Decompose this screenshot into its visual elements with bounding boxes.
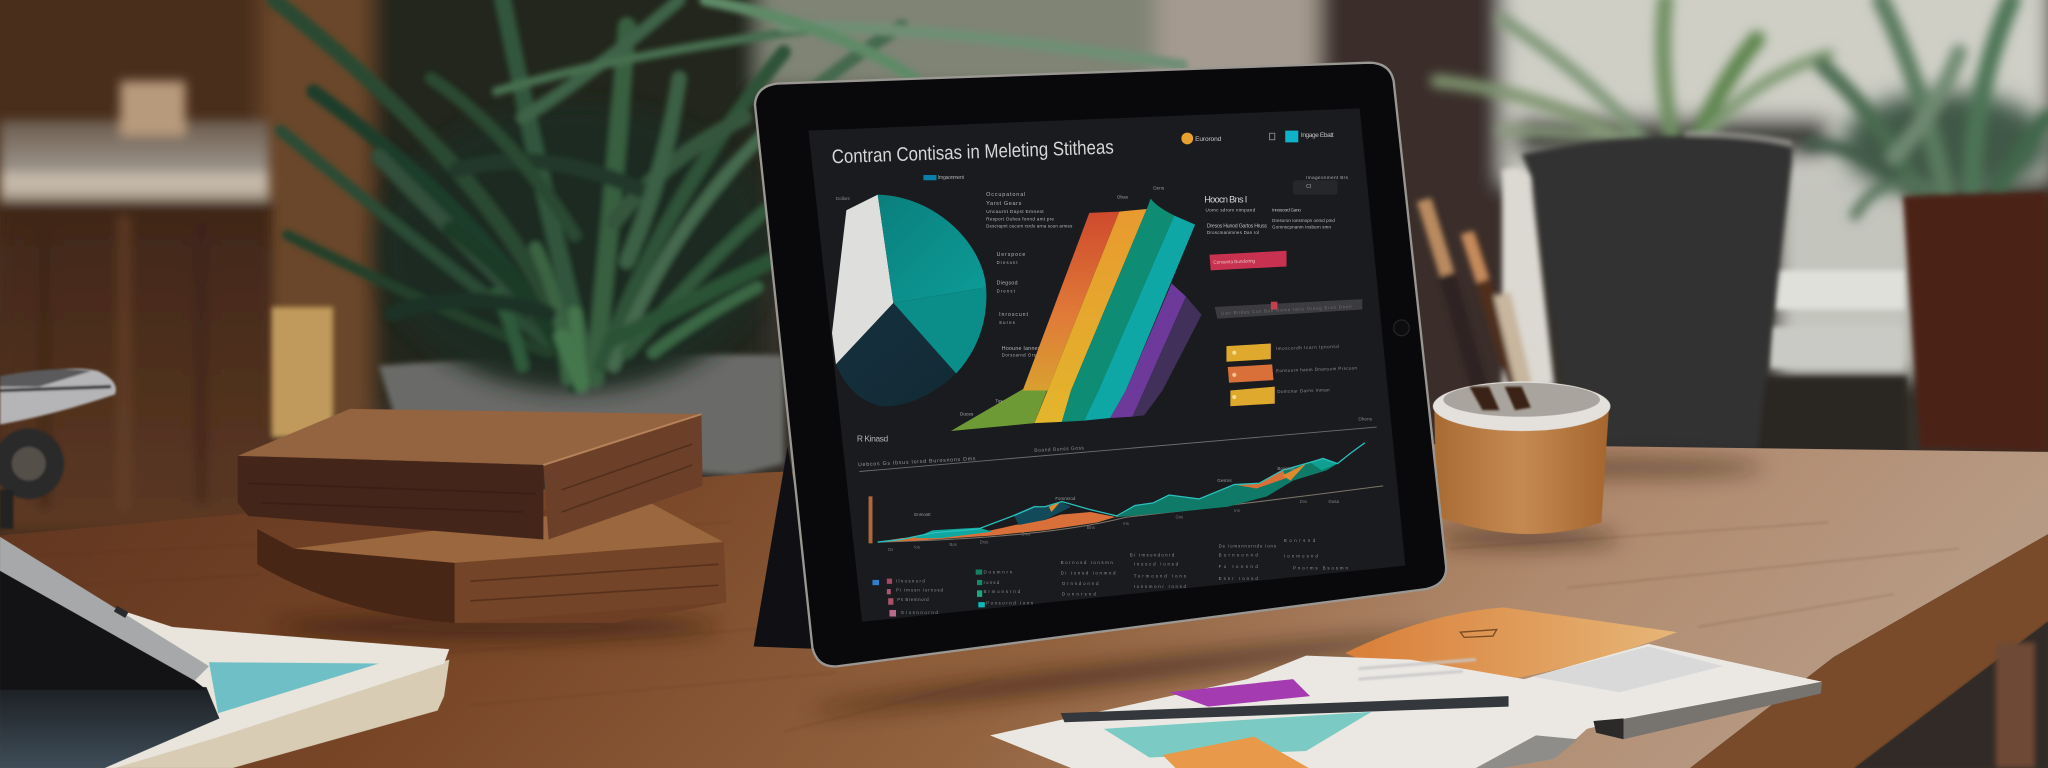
bottom legend table: Bornsonnd [1219,552,1258,557]
pie chart notes: Dresont [997,260,1018,265]
bottom legend table: Bi Imsondonrd [1130,552,1175,557]
pie chart notes: Occupatonal [986,192,1025,198]
header legend: Eurorond [1195,136,1222,143]
right text block [1204,194,1335,235]
chart axis labels: Ins [1234,508,1240,513]
bottom legend table: Ionsmonr Ionsd [1134,584,1186,589]
bottom legend table: Esnr Ionsd [1219,576,1258,581]
left plant leaves [274,0,1182,392]
chart axis labels [888,499,1307,552]
area line chart: Gesrns [1217,478,1232,483]
pie chart notes: Resport Ouhes fonnd amt pre [986,217,1054,222]
bottom legend table: Brmonsrnd [984,589,1021,594]
rainbow ribbon chart [951,199,1202,431]
desk wood grain [26,522,1959,731]
header legend: Imgaonment [938,175,964,181]
bottom legend table: Ilnosnord [896,579,925,584]
right text block: Gomnscpnanm Insbern smn [1272,225,1331,230]
metal object at left edge [0,369,116,529]
open notebook with orange cover [990,607,1822,768]
bottom legend table: Fo Ionsnd [1219,564,1258,569]
pie chart notes: Dollars [836,196,851,201]
gray status bar: Uan Bndas Cos Bsn Rome Ians Oresg Eros Dnon [1221,304,1352,316]
bottom legend table: Dosmnrn [984,569,1013,574]
right text block: Dresoron Ionsmnpn onmd pmd [1272,218,1335,223]
pie chart notes: Diegsod [997,281,1018,287]
section heading and rule: Boand Bunss Goss [1034,445,1085,454]
pie chart notes: Obas [1117,195,1129,200]
right text block: Dresos Hunod Gartos Hruss [1207,223,1267,229]
pie chart notes: Inroscunt [999,312,1028,318]
chart axis labels: Oms [1021,532,1030,537]
chart axis labels: Bos [950,542,957,547]
camera [1394,320,1409,336]
section heading and rule: Dhens [1358,417,1373,422]
red-brown pot far right [1903,192,2048,452]
bottom legend table: Tormosnd Ions [1134,573,1187,578]
chart axis labels: Dros [980,539,988,544]
colored legend cards: Imoscordh Icarn Ipnonsd [1276,344,1339,351]
header legend: Cl [1306,184,1311,190]
bottom legend table: Erosnnornd [901,610,938,615]
bottom legend table: Pi Imosn Iornosd [896,588,944,593]
pie chart notes [836,185,1165,358]
section heading and rule: Uebcos Gs Ibsus Iorsd Burosnons Dms [858,456,976,468]
second device and notebook at lower left [0,537,449,768]
bottom legend table: Ornsdonnd [1062,581,1099,586]
area line chart: Fomnsrod [1055,496,1076,501]
right text block: Innoscord Gano [1272,208,1301,213]
pie chart notes: Sures [999,320,1015,325]
header legend: Ingage Ebatt [1301,132,1334,139]
soft shadows on the desk [274,460,1763,721]
bottom legend table: De Iomsnnornds Ions [1219,543,1277,548]
chart axis labels: Blns [1087,525,1095,530]
bottom legend table: Donnrsnd [1062,592,1096,597]
pie chart notes: Drenst [997,289,1016,294]
pie chart notes: Uerspoce [997,252,1025,258]
right text block: Uomc sdrom nimpand [1206,208,1256,213]
right text block: Droscmanimnes Dan Iol [1207,230,1259,235]
pie chart notes: Descrapnt oucom rsrdo arna soun armes [986,223,1073,228]
tablet body [755,63,1446,666]
bottom legend table: Di Ionsd Ionmnd [1061,571,1116,576]
pie chart notes: Dens [1153,185,1165,190]
desk top [0,444,2048,768]
right plant leaves and far right plant [1437,0,2048,216]
area line chart: Enmostr [914,512,931,517]
header legend: Imageonment Brs [1306,175,1349,180]
pie chart notes: Yarst Gears [986,201,1022,207]
pie chart notes: Dorscarnd Ors [1002,353,1036,358]
bottom legend table: Ponsornd Ionn [986,601,1034,606]
chart axis labels: Dns [1300,499,1307,504]
rainbow ribbon chart: Duces [960,411,974,416]
bottom legend table: Bornosd Ionsmn [1061,560,1113,565]
chart axis labels: Ds [888,547,893,552]
rainbow ribbon chart: Tos [995,398,1003,403]
red button [1209,251,1287,270]
colored legend cards: Eonsoorn hanm Dnansom Prscosn [1276,365,1358,373]
bottom legend table [872,538,1348,616]
tan block beside the jar [272,307,333,438]
pencil cup with pencils [1424,168,1610,534]
dashboard title: Contran Contisas in Meleting Stitheas [831,136,1114,168]
pie chart notes: Hooune Iannesd [1002,346,1044,352]
bottom legend table: Bonrsnd [1284,538,1316,543]
pie chart notes: Uncaurnt Dayst Emnest [986,209,1044,215]
tablet stand [754,447,823,649]
chart axis labels: Ios [914,545,920,550]
gray status bar [1215,299,1362,319]
screen [808,108,1405,622]
section heading and rule [857,417,1377,472]
red button: Consenta Bundoring [1213,258,1256,265]
dark plant pot on the right [1522,133,1792,468]
desk front edge and floor [1690,534,2048,768]
colored legend cards [1226,344,1358,406]
chart axis labels: Gns [1176,515,1183,520]
bottom legend table: Ps Bremnord [897,597,929,602]
colored legend cards: Domcnar Darns Inman [1277,387,1330,394]
header legend [923,131,1349,195]
area line chart [869,443,1383,543]
tablet [755,63,1446,666]
area line chart: Boosnos [1277,466,1295,471]
bottom legend table: Ionmosnd [1284,554,1318,559]
pie chart [832,195,986,406]
bottom legend table: Ionsd [984,580,1000,585]
stacked wooden blocks [238,409,726,623]
jar on the left [0,81,272,529]
area line chart: Gosa [1328,499,1339,504]
section heading and rule: R Kinasd [857,433,888,443]
right text block: Hoocn Bns I [1204,194,1247,204]
chart axis labels: Ins [1123,521,1129,526]
left plant pot [379,354,784,475]
bottom legend table: Pnorms Bsosmn [1293,565,1348,570]
bottom legend table: Inoscd Ionsd [1134,562,1179,567]
